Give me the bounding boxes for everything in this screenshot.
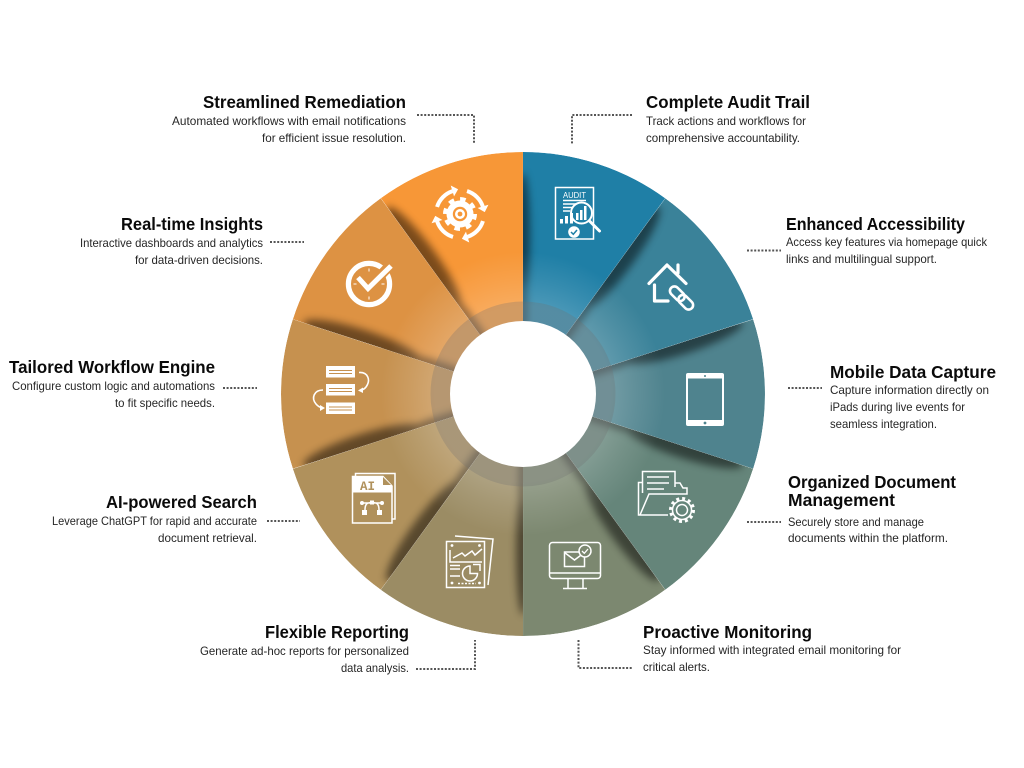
connector: Complete Audit Trail	[572, 115, 632, 144]
callout: Enhanced Accessibility: links and multilingual support.	[786, 252, 937, 266]
callout: Mobile Data Capture	[830, 362, 996, 431]
callout: AI-powered Search	[52, 492, 257, 545]
icon: audit report: AUDIT	[563, 190, 586, 200]
icon: document folder with gear	[638, 472, 694, 522]
callout: Enhanced Accessibility: Enhanced Accessibility	[786, 214, 965, 234]
callout: Proactive Monitoring: Proactive Monitoring	[643, 622, 812, 642]
callout: Streamlined Remediation: for efficient issue resolution.	[262, 131, 406, 145]
connector: Real-time Insights	[270, 241, 304, 243]
icon: house with link	[649, 265, 695, 311]
centre hole	[450, 321, 596, 467]
callout: Streamlined Remediation: Automated workflows with email notifications	[172, 114, 406, 128]
callout: Tailored Workflow Engine: Tailored Workflow Engine	[9, 357, 215, 377]
icon: AI file: AI	[360, 480, 375, 494]
infographic: feature wheel	[9, 95, 996, 674]
connector: Flexible Reporting	[416, 640, 475, 669]
callout: AI-powered Search: document retrieval.	[158, 531, 257, 545]
callout: Organized Document Management: Organized Document	[788, 472, 956, 492]
callout: Real-time Insights	[80, 214, 263, 267]
translucent ring	[430, 302, 616, 486]
connector: AI-powered Search	[267, 520, 300, 522]
icon: workflow stack	[314, 366, 368, 414]
callout: Organized Document Management	[788, 472, 956, 545]
icon: AI file	[352, 474, 395, 523]
callout: Flexible Reporting: Generate ad-hoc reports for personalized	[200, 644, 409, 658]
inner glow	[381, 252, 665, 536]
segment: Organized Document Management	[566, 416, 753, 590]
segment: Streamlined Remediation	[381, 152, 523, 335]
connector: Proactive Monitoring	[578, 640, 633, 668]
callout: Flexible Reporting: Flexible Reporting	[265, 622, 409, 642]
callout: Enhanced Accessibility	[786, 214, 987, 266]
callout: Mobile Data Capture: Capture information directly on	[830, 383, 989, 397]
segment: Real-time Insights	[293, 198, 480, 372]
segment: Tailored Workflow Engine	[281, 320, 454, 468]
icon: tablet	[686, 373, 724, 426]
callout: Streamlined Remediation	[172, 92, 406, 145]
callout: Proactive Monitoring	[643, 622, 901, 674]
segment: Complete Audit Trail	[523, 152, 665, 335]
callout: Complete Audit Trail: Complete Audit Trail	[646, 92, 810, 112]
callout: Mobile Data Capture: iPads during live events for	[830, 400, 965, 414]
callout: Tailored Workflow Engine	[9, 357, 215, 410]
callout: Mobile Data Capture: Mobile Data Capture	[830, 362, 996, 382]
wheel	[281, 152, 765, 636]
connector: Streamlined Remediation	[417, 115, 474, 144]
callout: Complete Audit Trail	[646, 92, 810, 145]
callout: Real-time Insights: for data-driven decisions.	[135, 253, 263, 267]
segment: AI-powered Search	[293, 416, 480, 590]
callout: Tailored Workflow Engine: Configure custom logic and automations	[12, 379, 215, 393]
callout: Tailored Workflow Engine: to fit specific needs.	[115, 396, 215, 410]
callout: Flexible Reporting: data analysis.	[341, 661, 409, 675]
callout: Complete Audit Trail: comprehensive accountability.	[646, 131, 800, 145]
segment: Mobile Data Capture	[592, 320, 765, 468]
icon: monitor with email	[550, 542, 600, 588]
icon: gear with arrows	[430, 184, 490, 244]
callout: Organized Document Management: Management	[788, 490, 895, 510]
callout: AI-powered Search: AI-powered Search	[106, 492, 257, 512]
segment: Enhanced Accessibility	[566, 198, 753, 372]
callout: Streamlined Remediation: Streamlined Remediation	[203, 92, 406, 112]
callout: Organized Document Management: documents within the platform.	[788, 531, 948, 545]
icon: audit report	[556, 188, 600, 239]
callout: Enhanced Accessibility: Access key features via homepage quick	[786, 235, 987, 249]
callout: Proactive Monitoring: critical alerts.	[643, 660, 710, 674]
icon: reports	[446, 536, 493, 588]
callout: Mobile Data Capture: seamless integration.	[830, 417, 937, 431]
callout: Real-time Insights: Interactive dashboards and analytics	[80, 236, 263, 250]
segment: Proactive Monitoring	[523, 453, 665, 636]
callout: Flexible Reporting	[200, 622, 409, 675]
callout: AI-powered Search: Leverage ChatGPT for rapid and accurate	[52, 514, 257, 528]
segment: Flexible Reporting	[381, 453, 523, 636]
connector: Mobile Data Capture	[788, 387, 822, 389]
connector: Enhanced Accessibility	[747, 250, 781, 252]
connector: Organized Document Management	[747, 521, 781, 523]
callout: Proactive Monitoring: Stay informed with integrated email monitoring for	[643, 643, 901, 657]
icon: clock with check	[348, 263, 391, 305]
callout: Complete Audit Trail: Track actions and workflows for	[646, 114, 806, 128]
callout: Organized Document Management: Securely store and manage	[788, 515, 924, 529]
callout: Real-time Insights: Real-time Insights	[121, 214, 263, 234]
connector: Tailored Workflow Engine	[223, 387, 257, 389]
